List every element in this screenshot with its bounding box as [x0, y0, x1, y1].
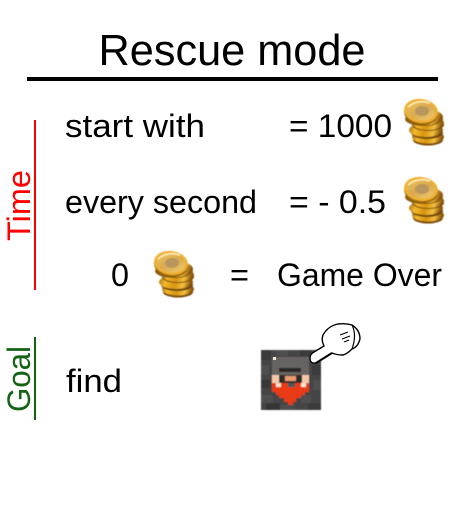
- row: find: find: [66, 363, 122, 399]
- row: every second: every second: [65, 184, 257, 220]
- label: Time: Time: [1, 170, 37, 241]
- icon: coin stack 2: [402, 175, 444, 224]
- section: time: [1, 97, 444, 298]
- row: zero coins: 0: [111, 257, 129, 293]
- title underline: [27, 77, 438, 81]
- value: minus 0.5: = - 0.5: [289, 184, 386, 220]
- value: game over: Game Over: [277, 257, 442, 293]
- equals sign: =: [230, 257, 249, 293]
- title: Rescue mode: [98, 26, 366, 75]
- time section line: [34, 120, 36, 290]
- icon: miner avatar: [261, 350, 321, 410]
- icon: coin stack 1: [402, 97, 444, 146]
- goal section line: [34, 337, 36, 420]
- section: goal: [1, 324, 360, 420]
- icon: pointing hand: [310, 324, 360, 363]
- icon: coin stack 3: [152, 249, 194, 298]
- value: 1000: = 1000: [289, 108, 392, 144]
- row: start with: start with: [65, 108, 205, 144]
- label: Goal: Goal: [1, 346, 37, 412]
